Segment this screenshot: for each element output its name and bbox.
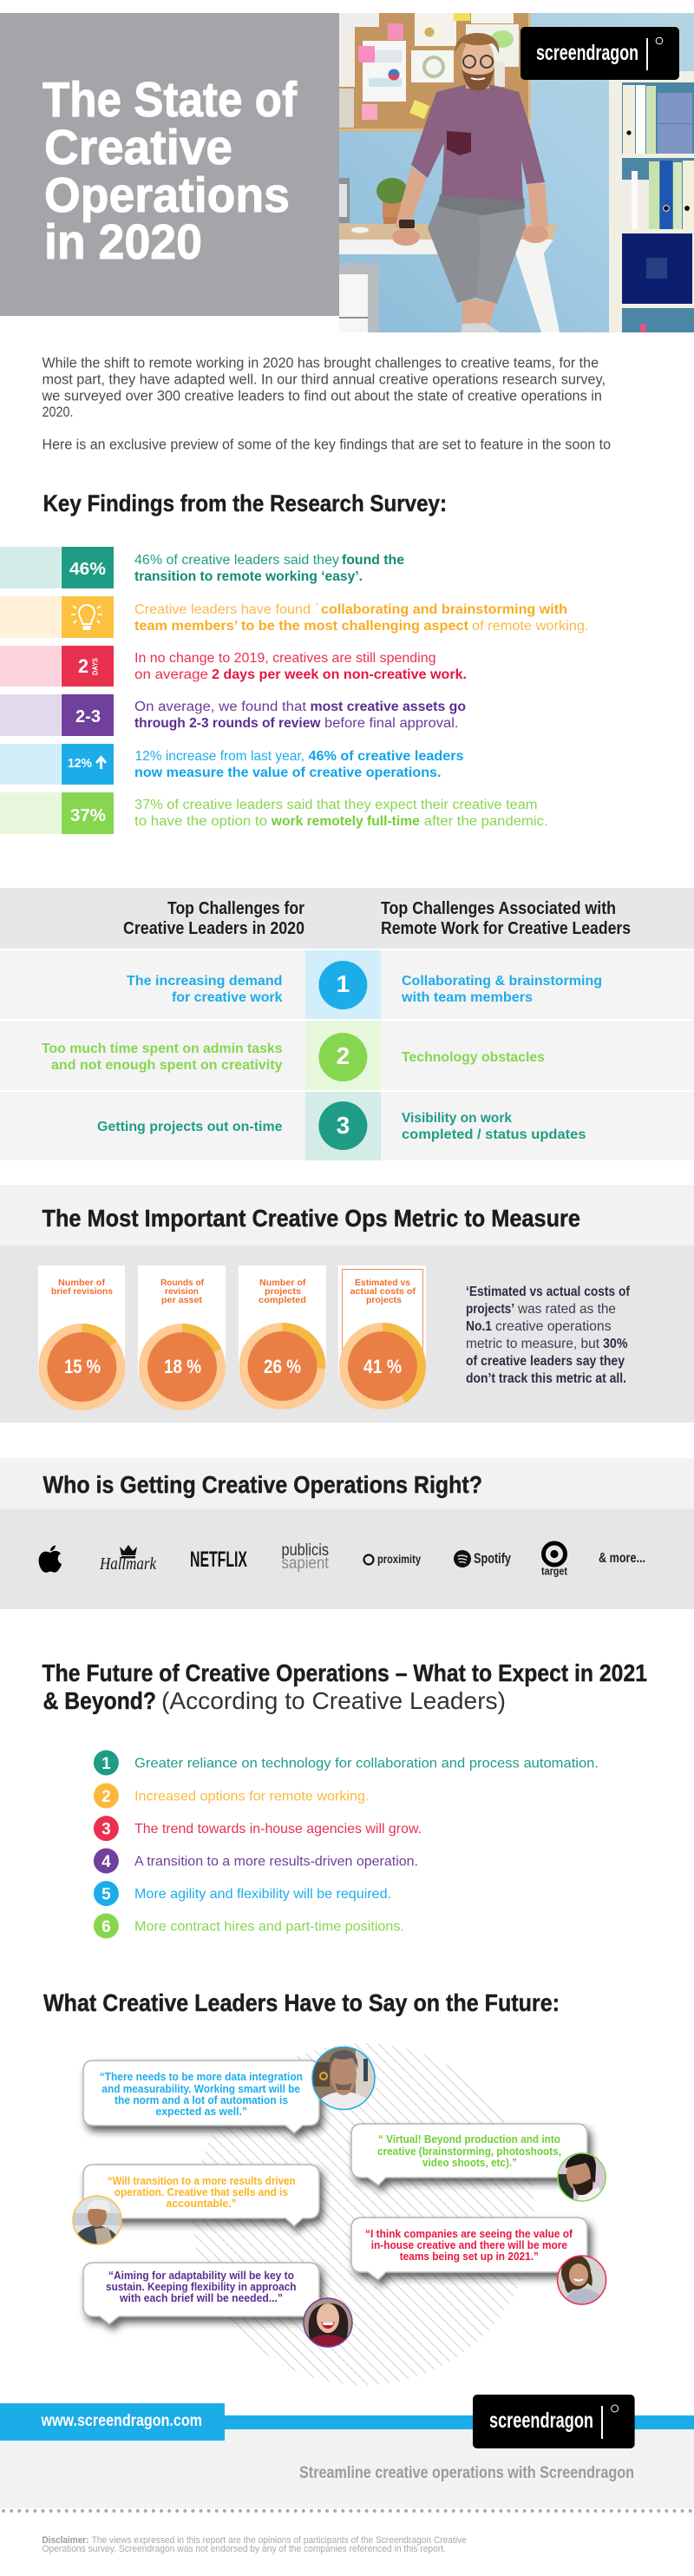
prediction 1 (94, 1750, 599, 1776)
portrait: man in cap (73, 2196, 121, 2244)
quote bubble: red: “I think companies are seeing the value of (365, 2227, 573, 2240)
column headings: Top Challenges for (167, 898, 304, 918)
icon: up arrow (96, 757, 106, 769)
finding 1: 46% of creative leaders said they (134, 553, 339, 568)
finding 3: In no change to 2019, creatives are still spending (134, 651, 435, 666)
heading: key findings: Key Findings from the Research Survey: (43, 490, 447, 516)
quote bubble: blue: “There needs to be more data integration (100, 2070, 303, 2083)
title (43, 72, 298, 270)
column headings: Top Challenges Associated with (381, 898, 616, 918)
challenge row 1: for creative work (172, 990, 283, 1005)
column headings: Creative Leaders in 2020 (123, 918, 304, 938)
finding 6: 37% of creative leaders said that they expect their creative team (134, 798, 538, 812)
logo: target: target (541, 1566, 568, 1578)
quote bubble: blue: the norm and a lot of automation is (115, 2093, 288, 2106)
challenge row 2: Technology obstacles (402, 1050, 545, 1065)
challenge row 1: 1 (337, 970, 350, 997)
prediction 2 (94, 1783, 370, 1809)
challenge row 3 (0, 1092, 694, 1160)
logo: apple (39, 1545, 62, 1573)
finding 3: DAYS (92, 657, 99, 675)
finding 2: Creative leaders have found ` (134, 602, 319, 617)
metric card: rounds of revision: per asset (161, 1295, 202, 1305)
intro paragraph (42, 356, 611, 453)
logo: publicis sapient: sapient (281, 1554, 330, 1573)
metric card: brief revisions (38, 1265, 125, 1410)
challenge row 2: Too much time spent on admin tasks (42, 1042, 283, 1056)
finding 4: before final approval. (324, 716, 458, 731)
metric card: estimated vs actual costs (highlighted): 41 % (363, 1356, 402, 1377)
portrait ring: yellow (73, 2196, 121, 2244)
quote bubble: purple (83, 2263, 319, 2324)
finding 3: 2 (78, 655, 88, 677)
quote bubble: green: creative (brainstorming, photoshoots, (377, 2145, 561, 2158)
heading: who: Who is Getting Creative Operations Right? (43, 1471, 482, 1498)
prediction 1: 1 (101, 1755, 111, 1773)
quote bubble: green (351, 2124, 587, 2185)
finding 1: transition to remote working ‘easy’. (134, 569, 363, 584)
metric card: estimated vs actual costs (highlighted) (338, 1265, 426, 1410)
prediction 2: Increased options for remote working. (134, 1790, 370, 1804)
prediction 5: 5 (101, 1886, 111, 1904)
metric card: rounds of revision: revision (165, 1286, 199, 1297)
and more: & more... (599, 1551, 645, 1566)
metric card: estimated vs actual costs (highlighted): actual costs of (350, 1286, 416, 1297)
logo: proximity: proximity (377, 1553, 421, 1566)
metric callout text: don’t track this metric at all. (466, 1371, 626, 1386)
challenge row 2: and not enough spent on creativity (51, 1058, 283, 1073)
metric card: brief revisions: Number of (58, 1278, 106, 1288)
finding 6 (0, 792, 548, 834)
finding 1: 46% (69, 560, 106, 579)
finding 4: On average, we found that (134, 700, 307, 714)
heading: metric: The Most Important Creative Ops Metric to Measure (42, 1205, 580, 1232)
quote bubble: green: “ Virtual! Beyond production and into (378, 2132, 560, 2146)
disclaimer: Operations survey. Screendragon was not endorsed by any of the companies referenced in this report. (42, 2544, 446, 2554)
finding 2: team members’ to be the most challenging aspect (134, 619, 468, 634)
intro paragraph: 2020. (42, 404, 73, 420)
intro paragraph: Here is an exclusive preview of some of the key findings that are set to feature in the soon to (42, 437, 611, 453)
challenge row 1 (0, 950, 694, 1019)
finding 5: 12% (68, 756, 92, 771)
heading: future of creative operations: & Beyond? (43, 1687, 156, 1714)
metric card: projects completed: projects (265, 1286, 301, 1297)
metric card: rounds of revision: 18 % (164, 1356, 201, 1377)
challenge row 2: 2 (337, 1042, 350, 1069)
metric callout text: ‘Estimated vs actual costs of (466, 1285, 631, 1299)
quote bubble: purple: sustain. Keeping flexibility in approach (106, 2280, 297, 2293)
challenge row 3: Visibility on work (402, 1111, 512, 1126)
finding 6: after the pandemic. (424, 814, 548, 829)
portrait ring: blue (312, 2047, 375, 2109)
portrait ring: purple (304, 2298, 352, 2347)
metric card: projects completed (239, 1265, 326, 1410)
challenge row 3: Getting projects out on-time (97, 1120, 283, 1134)
metric card: projects completed: 26 % (264, 1356, 301, 1377)
panel: who is getting it right (0, 1458, 694, 1609)
portrait ring: red (558, 2256, 606, 2304)
column headings: Remote Work for Creative Leaders (381, 918, 631, 938)
prediction 6: 6 (101, 1918, 111, 1936)
hero: title panel (0, 13, 339, 316)
finding 3: on average (134, 667, 208, 682)
challenge row 2 (0, 1021, 694, 1090)
metric callout text: metric to measure, but (466, 1337, 600, 1351)
logo: hallmark: Hallmark (99, 1554, 157, 1574)
quote bubble: yellow: operation. Creative that sells and is (115, 2185, 288, 2198)
finding 4: most creative assets go (311, 700, 466, 714)
finding 5 (0, 744, 463, 785)
title: Creative (44, 120, 232, 175)
footer panel (0, 2395, 694, 2508)
quote bubble: blue: expected as well.” (156, 2105, 247, 2118)
quote bubble: green: video shoots, etc).” (422, 2156, 517, 2169)
metric card: brief revisions: brief revisions (51, 1286, 113, 1297)
metric card: rounds of revision: Rounds of (160, 1278, 204, 1288)
logo: publicis sapient (281, 1541, 330, 1573)
finding 5: 46% of creative leaders (309, 749, 463, 764)
prediction 5: More agility and flexibility will be required. (134, 1887, 391, 1902)
panel: top challenges (0, 888, 694, 1160)
finding 3 (0, 646, 467, 687)
finding 4: through 2-3 rounds of review (134, 716, 321, 731)
metric callout text: creative operations (495, 1319, 612, 1334)
quote bubble: purple: with each brief will be needed...” (119, 2291, 283, 2304)
prediction 4 (94, 1849, 418, 1873)
prediction 6 (94, 1913, 404, 1939)
quote bubble: red: in-house creative and there will be more (371, 2238, 567, 2251)
finding 5: 12% increase from last year, (135, 749, 304, 764)
prediction 4: 4 (101, 1853, 111, 1871)
metric card: estimated vs actual costs (highlighted): projects (366, 1295, 402, 1305)
footer logo (473, 2395, 635, 2448)
intro paragraph: While the shift to remote working in 2020 has brought challenges to creative teams, for the (42, 356, 599, 371)
hero photo: man sitting on a desk (339, 13, 694, 332)
quote bubble: yellow: accountable.” (167, 2197, 237, 2210)
metric card: projects completed: Number of (259, 1278, 306, 1288)
footer logo: screendragon (489, 2408, 593, 2433)
website link: www.screendragon.com (41, 2412, 202, 2430)
hero logo: screendragon (520, 27, 679, 80)
portrait: bearded man (558, 2153, 606, 2202)
finding 6: to have the option to (134, 814, 267, 829)
prediction 5 (94, 1881, 391, 1906)
finding 4: 2-3 (75, 707, 101, 726)
hero logo: screendragon: screendragon (536, 41, 638, 65)
metric callout text: was rated as the (517, 1302, 616, 1317)
prediction 1: Greater reliance on technology for collaboration and process automation. (134, 1757, 599, 1771)
intro paragraph: we surveyed over 300 creative leaders to find out about the state of creative operations in (42, 389, 602, 404)
finding 6: 37% (70, 806, 106, 825)
logo: target (541, 1543, 568, 1578)
prediction 3: The trend towards in-house agencies will grow. (134, 1822, 422, 1837)
heading: future of creative operations (42, 1659, 647, 1714)
quote bubble: blue: and measurability. Working smart will be (101, 2082, 300, 2095)
portrait: smiling woman (304, 2298, 352, 2347)
logo: publicis sapient: publicis (281, 1541, 329, 1560)
panel: most important metric (0, 1185, 694, 1423)
prediction 2: 2 (101, 1788, 111, 1806)
portrait ring: green (558, 2153, 606, 2201)
prediction 3: 3 (101, 1821, 111, 1839)
finding 1: found the (342, 553, 404, 568)
prediction 4: A transition to a more results-driven operation. (134, 1854, 418, 1870)
metric callout text: projects’ (466, 1302, 514, 1317)
portrait: man with grey hair (312, 2047, 375, 2110)
challenge row 3: 3 (337, 1112, 350, 1139)
title: in 2020 (44, 214, 202, 270)
challenge row 1: Collaborating & brainstorming (402, 974, 602, 989)
quote bubble: yellow: “Will transition to a more results driven (108, 2174, 296, 2187)
metric card: estimated vs actual costs (highlighted): Estimated vs (355, 1278, 410, 1288)
finding 4 (0, 694, 466, 736)
portrait: woman with curly hair (557, 2255, 607, 2304)
disclaimer: Disclaimer: (42, 2535, 88, 2546)
quote bubble: purple: “Aiming for adaptability will be key to (108, 2269, 294, 2282)
icon: light bulb (71, 605, 102, 630)
challenge row 1: The increasing demand (127, 974, 283, 989)
finding 1 (0, 547, 404, 588)
finding 5: now measure the value of creative operations. (134, 766, 442, 780)
quote bubble: red (351, 2218, 587, 2280)
logo: hallmark (99, 1545, 157, 1574)
finding 6: work remotely full-time (271, 814, 420, 829)
disclaimer (42, 2535, 467, 2554)
logo: netflix: NETFLIX (190, 1548, 247, 1572)
metric callout text: No.1 (466, 1319, 492, 1334)
finding 3: 2 days per week on non-creative work. (212, 667, 467, 682)
column headings (123, 898, 631, 938)
heading: what creative leaders say: What Creative Leaders Have to Say on the Future: (43, 1989, 560, 2016)
list: future predictions (94, 1750, 599, 1939)
disclaimer: The views expressed in this report are the opinions of participants of the Screendragon Creative (92, 2535, 467, 2546)
title: The State of (43, 72, 298, 128)
finding 2 (0, 596, 588, 638)
challenge row 1: with team members (401, 990, 533, 1005)
background: striped circle (191, 2040, 538, 2387)
metric callout text: of creative leaders say they (466, 1354, 625, 1369)
challenge row 3: completed / status updates (402, 1127, 586, 1142)
metric card: rounds of revision (138, 1265, 226, 1410)
logo: proximity (364, 1553, 421, 1566)
logo: spotify: Spotify (474, 1551, 512, 1567)
metric callout text (466, 1285, 631, 1386)
prediction 6: More contract hires and part-time positions. (134, 1920, 404, 1934)
title: Operations (44, 168, 290, 223)
quote bubble: blue (83, 2060, 319, 2133)
finding 2: collaborating and brainstorming with (321, 602, 567, 617)
quote bubble: red: teams being set up in 2021.” (400, 2250, 539, 2263)
heading: future of creative operations: (According to Creative Leaders) (161, 1687, 506, 1714)
metric card: brief revisions: 15 % (64, 1356, 101, 1377)
metric callout text: 30% (603, 1337, 628, 1351)
prediction 3 (94, 1816, 422, 1841)
finding 2: of remote working. (472, 619, 588, 634)
tagline: Streamline creative operations with Screendragon (299, 2464, 634, 2482)
intro paragraph: most part, they have adapted well. In our third annual creative operations research survey, (42, 371, 606, 387)
metric card: projects completed: completed (259, 1295, 306, 1305)
logo: spotify (454, 1550, 512, 1567)
quote bubble: yellow (83, 2165, 319, 2226)
